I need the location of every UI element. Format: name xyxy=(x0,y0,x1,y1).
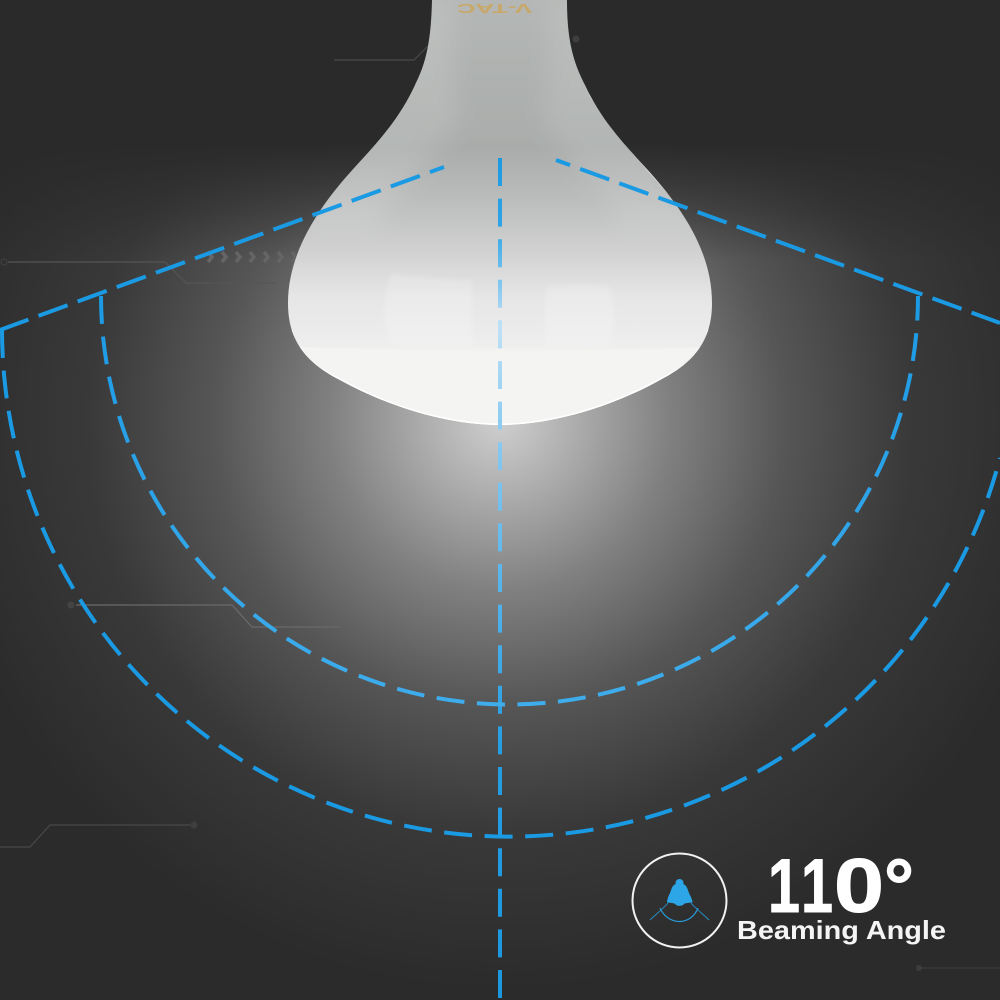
light bulb xyxy=(288,0,712,430)
badge: beaming angle xyxy=(632,844,946,948)
outer arc xyxy=(2,330,1000,837)
side sheen xyxy=(337,19,643,206)
value: 110° xyxy=(768,844,914,929)
value: 110°: 1 xyxy=(801,844,833,929)
bulb logo: V-TAC xyxy=(456,1,532,16)
value: 110°: 0 xyxy=(834,844,884,929)
left beam edge xyxy=(0,167,444,330)
right beam edge xyxy=(556,160,1000,323)
chevron row xyxy=(208,252,296,262)
centre axis xyxy=(498,158,502,1000)
value: 110°: 1 xyxy=(768,844,800,929)
inner arc xyxy=(101,296,918,704)
bulb reflections xyxy=(384,273,614,346)
icon: bulb in circle xyxy=(632,854,726,948)
value: 110°: ° xyxy=(884,844,914,929)
label: Beaming Angle: Beaming Angle xyxy=(737,915,946,945)
